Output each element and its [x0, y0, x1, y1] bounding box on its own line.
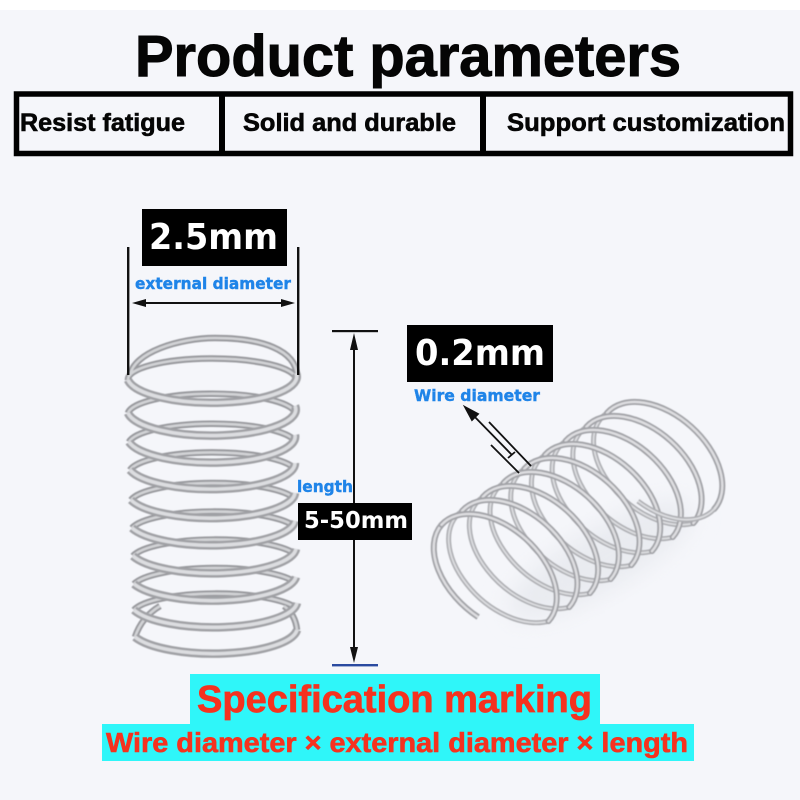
- feature table: [16, 94, 790, 154]
- arrow: wire diameter: [465, 407, 531, 473]
- title: Product parameters: [135, 24, 681, 89]
- label: external diameter: external diameter: [135, 274, 291, 293]
- label: length: length: [297, 477, 353, 496]
- value box: 0.2mm: 0.2mm: [415, 333, 545, 374]
- value box: 5-50mm: 5-50mm: [304, 508, 408, 534]
- arrow: length: [350, 333, 358, 663]
- value box: 0.2mm: [407, 325, 553, 382]
- banner heading: Specification marking: [197, 679, 592, 721]
- value box: 5-50mm: [298, 503, 412, 540]
- left spring (upright): [128, 338, 297, 654]
- label: wire diameter: Wire diameter: [414, 386, 540, 405]
- feature: support customization: Support customization: [507, 109, 785, 137]
- wire diameter dimension: [407, 325, 553, 473]
- length dimension: [297, 330, 412, 666]
- feature: resist fatigue: Resist fatigue: [20, 109, 185, 137]
- feature: solid and durable: Solid and durable: [243, 109, 456, 137]
- external diameter dimension: [127, 209, 299, 375]
- banner formula: Wire diameter × external diameter × length: [106, 727, 688, 758]
- arrow: external diameter: [132, 299, 295, 307]
- value box: 2.5mm: [142, 209, 287, 266]
- specification marking banner: [102, 674, 694, 761]
- value box: 2.5mm: 2.5mm: [149, 217, 278, 258]
- right spring (tilted): [411, 379, 745, 655]
